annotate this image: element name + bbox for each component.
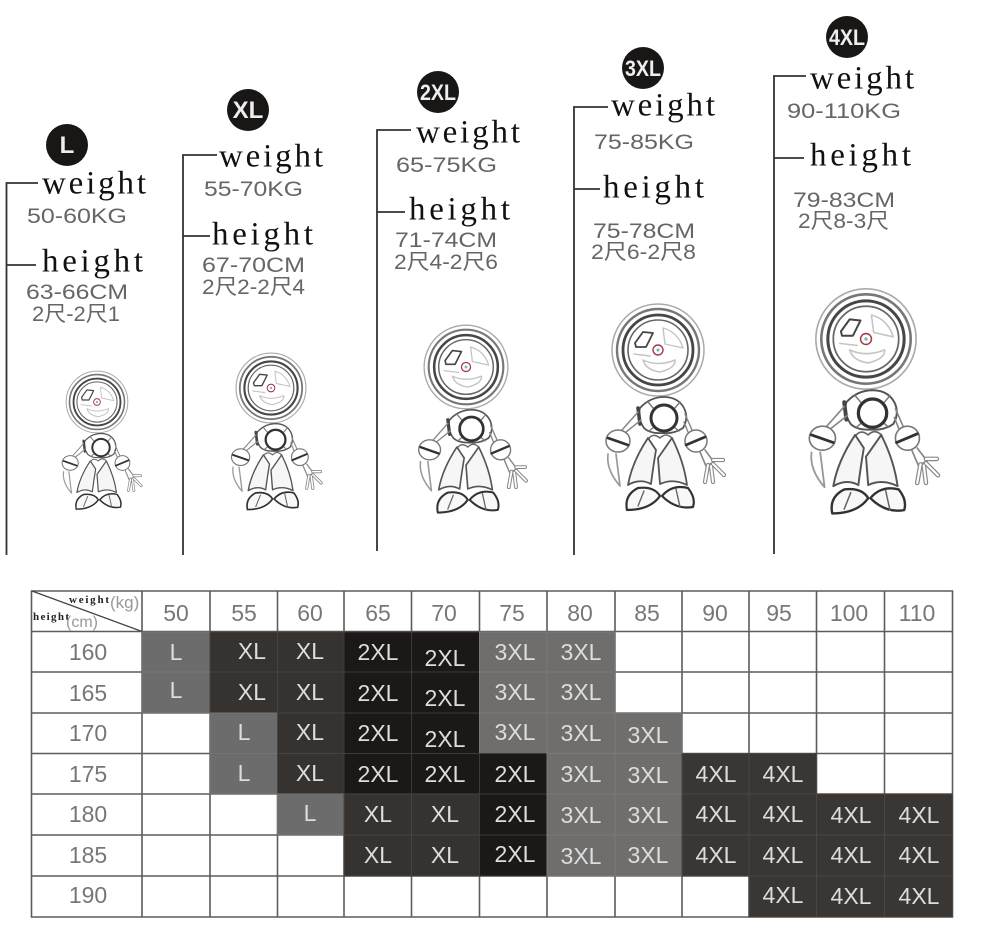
row 180 [69,794,952,835]
row 180: 180 [69,801,107,827]
row 175: 2XL [425,761,466,787]
row 160: 160 [69,639,107,665]
value: length in chi: 2尺6-2尺8 [591,241,696,264]
weight header row: 75 [499,600,525,626]
row 180: 4XL [899,802,940,828]
table corner header: (kg) [110,593,139,612]
row 185: XL [431,842,459,868]
row 190: 4XL [899,883,940,909]
row 175: XL [296,760,324,786]
icon: robot 4XL [809,289,938,513]
row 170: 2XL [425,726,466,752]
weight header row: 60 [297,600,323,626]
row 175: L [238,760,251,786]
badge: XL: XL [233,97,263,124]
label: height: height [212,216,313,252]
row 170: 170 [69,720,107,746]
row 160: XL [296,638,324,664]
row 185: 4XL [696,842,737,868]
row 185: 2XL [495,841,536,867]
table corner header [32,591,142,632]
row 175: 2XL [358,761,399,787]
weight header row: 80 [567,600,593,626]
badge: XL [227,89,269,131]
label: height: height [810,138,911,174]
label: weight: weight [810,60,914,96]
row 185: 4XL [899,842,940,868]
size table [32,591,952,917]
row 190 [69,876,952,917]
row 170: 3XL [628,722,669,748]
badge: 2XL [417,71,459,113]
row 180: 4XL [696,801,737,827]
row 185: 4XL [831,842,872,868]
row 165 [69,672,615,713]
value: weight range: 75-85KG [594,131,694,154]
badge: 2XL: 2XL [420,80,456,105]
value: weight range: 55-70KG [204,178,303,201]
bracket line: 4XL [774,76,806,554]
row 160: L [170,639,183,665]
row 175: 2XL [495,761,536,787]
row 160: 2XL [425,645,466,671]
badge: 3XL [622,47,664,89]
table corner header: height [33,611,69,623]
row 185: XL [364,842,392,868]
value: length in chi: 2尺-2尺1 [32,303,120,326]
label: weight: weight [611,88,715,124]
row 160: 3XL [561,639,602,665]
panel: size 3XL [574,47,724,555]
row 190: 190 [69,882,107,908]
row 170: XL [296,719,324,745]
weight header row: 50 [163,600,189,626]
value: weight range: 65-75KG [396,154,497,177]
value: height range: 63-66CM [26,281,128,304]
label: height: height [603,170,704,206]
row 170 [69,713,682,754]
weight header row [163,600,935,626]
row 165: 2XL [358,680,399,706]
table corner header: (cm) [66,614,98,631]
label: height: height [42,244,143,280]
row 180: XL [364,801,392,827]
row 180: 3XL [561,802,602,828]
row 180: 4XL [831,802,872,828]
badge: L: L [60,132,74,159]
row 180: XL [431,801,459,827]
row 180: 3XL [628,802,669,828]
row 185: 185 [69,842,107,868]
row 170: 2XL [358,720,399,746]
row 165: XL [238,679,266,705]
badge: 4XL: 4XL [829,25,865,50]
row 170: 3XL [495,719,536,745]
label: height: height [409,192,510,228]
weight header row: 70 [431,600,457,626]
value: weight range: 90-110KG [787,100,901,123]
row 185: 4XL [763,842,804,868]
icon: robot 2XL [419,325,526,513]
row 165: 3XL [561,679,602,705]
weight header row: 110 [899,600,935,626]
weight header row: 85 [634,600,660,626]
value: length in chi: 2尺2-2尺4 [202,276,305,299]
panel: size L [6,124,146,555]
icon: robot 3XL [606,304,724,510]
row 160 [69,632,615,672]
bracket line: L [6,183,38,555]
row 165: 3XL [495,679,536,705]
row 175 [69,754,816,794]
row 175: 3XL [561,761,602,787]
row 165: 165 [69,680,107,706]
row 185: 3XL [628,842,669,868]
badge: 3XL: 3XL [625,56,661,81]
row 170: L [238,719,251,745]
row 165: 2XL [425,685,466,711]
bracket line: XL [183,155,217,555]
value: length in chi: 2尺4-2尺6 [394,251,498,274]
weight header row: 65 [365,600,391,626]
row 185: 3XL [561,843,602,869]
panel: size 2XL [377,71,526,551]
row 175: 4XL [696,761,737,787]
icon: robot L [62,371,141,509]
row 175: 175 [69,761,107,787]
panel: size 4XL [774,16,938,554]
value: height range: 79-83CM [793,189,895,212]
row 160: 3XL [495,639,536,665]
badge: 4XL [826,16,868,58]
row 190: 4XL [763,882,804,908]
row 180: 2XL [495,801,536,827]
row 180: L [304,800,317,826]
icon: robot XL [231,353,321,510]
row 160: 2XL [358,639,399,665]
table corner header: weight [69,594,109,606]
value: height range: 75-78CM [593,220,695,243]
badge: L [46,124,88,166]
row 190: 4XL [831,883,872,909]
weight header row: 90 [702,600,728,626]
row 160: XL [238,638,266,664]
weight header row: 100 [830,600,868,626]
bracket line: 2XL [377,130,411,551]
label: weight: weight [219,138,323,174]
label: weight: weight [416,114,520,150]
weight header row: 55 [231,600,257,626]
panel: size XL [183,89,323,555]
row 165: L [170,677,183,703]
value: height range: 71-74CM [395,229,497,252]
label: weight: weight [42,166,146,202]
value: length in chi: 2尺8-3尺 [798,210,889,233]
row 185 [69,835,952,876]
row 175: 3XL [628,762,669,788]
weight header row: 95 [766,600,792,626]
row 165: XL [296,679,324,705]
value: height range: 67-70CM [202,254,305,277]
row 180: 4XL [763,801,804,827]
bracket line: 3XL [574,107,608,555]
value: weight range: 50-60KG [27,205,127,228]
row 170: 3XL [561,720,602,746]
row 175: 4XL [763,761,804,787]
